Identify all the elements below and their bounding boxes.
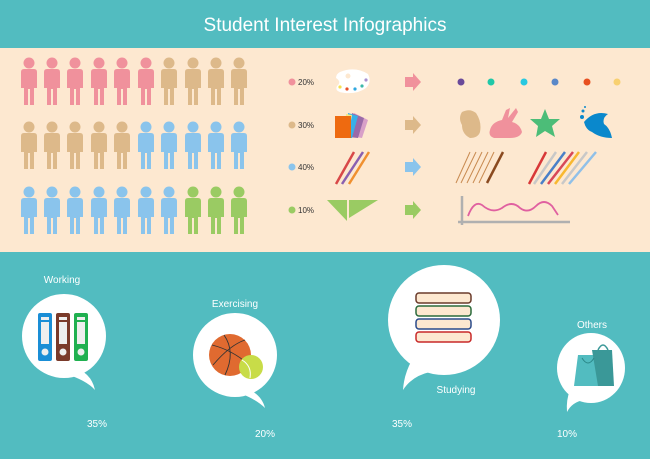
label: working: Working — [44, 275, 80, 286]
bubble: studying — [388, 265, 500, 390]
header bar — [0, 0, 650, 48]
icon: palette — [336, 69, 370, 93]
icon: owl — [460, 110, 480, 138]
icon: starfish — [530, 109, 560, 137]
legend: 20% — [298, 78, 314, 87]
value: studying: 35% — [392, 419, 412, 430]
icon: brushes — [456, 152, 503, 183]
title: Student Interest Infographics — [204, 15, 446, 36]
icon: fish — [580, 106, 612, 138]
bubble: exercising — [193, 313, 277, 408]
icon: pens — [529, 152, 596, 184]
people grid — [21, 58, 247, 234]
label: exercising: Exercising — [212, 299, 258, 310]
icon: rabbit — [490, 108, 522, 138]
arrows — [405, 73, 421, 219]
bubble: working — [22, 294, 106, 390]
value: working: 35% — [87, 419, 107, 430]
bubble: others — [557, 333, 625, 412]
legend: 10% — [298, 206, 314, 215]
icon: coloured pencils — [336, 152, 369, 184]
label: studying: Studying — [437, 385, 475, 396]
value: others: 10% — [557, 429, 577, 440]
legend: 40% — [298, 163, 314, 172]
beige panel — [0, 48, 650, 252]
icon: paper folds — [327, 200, 378, 221]
chart: wave — [458, 196, 570, 225]
legend: 30% — [298, 121, 314, 130]
value: exercising: 20% — [255, 429, 275, 440]
legend — [288, 78, 314, 215]
label: others: Others — [577, 320, 607, 331]
icon: paper stack — [335, 113, 368, 138]
paint dots — [458, 78, 620, 86]
